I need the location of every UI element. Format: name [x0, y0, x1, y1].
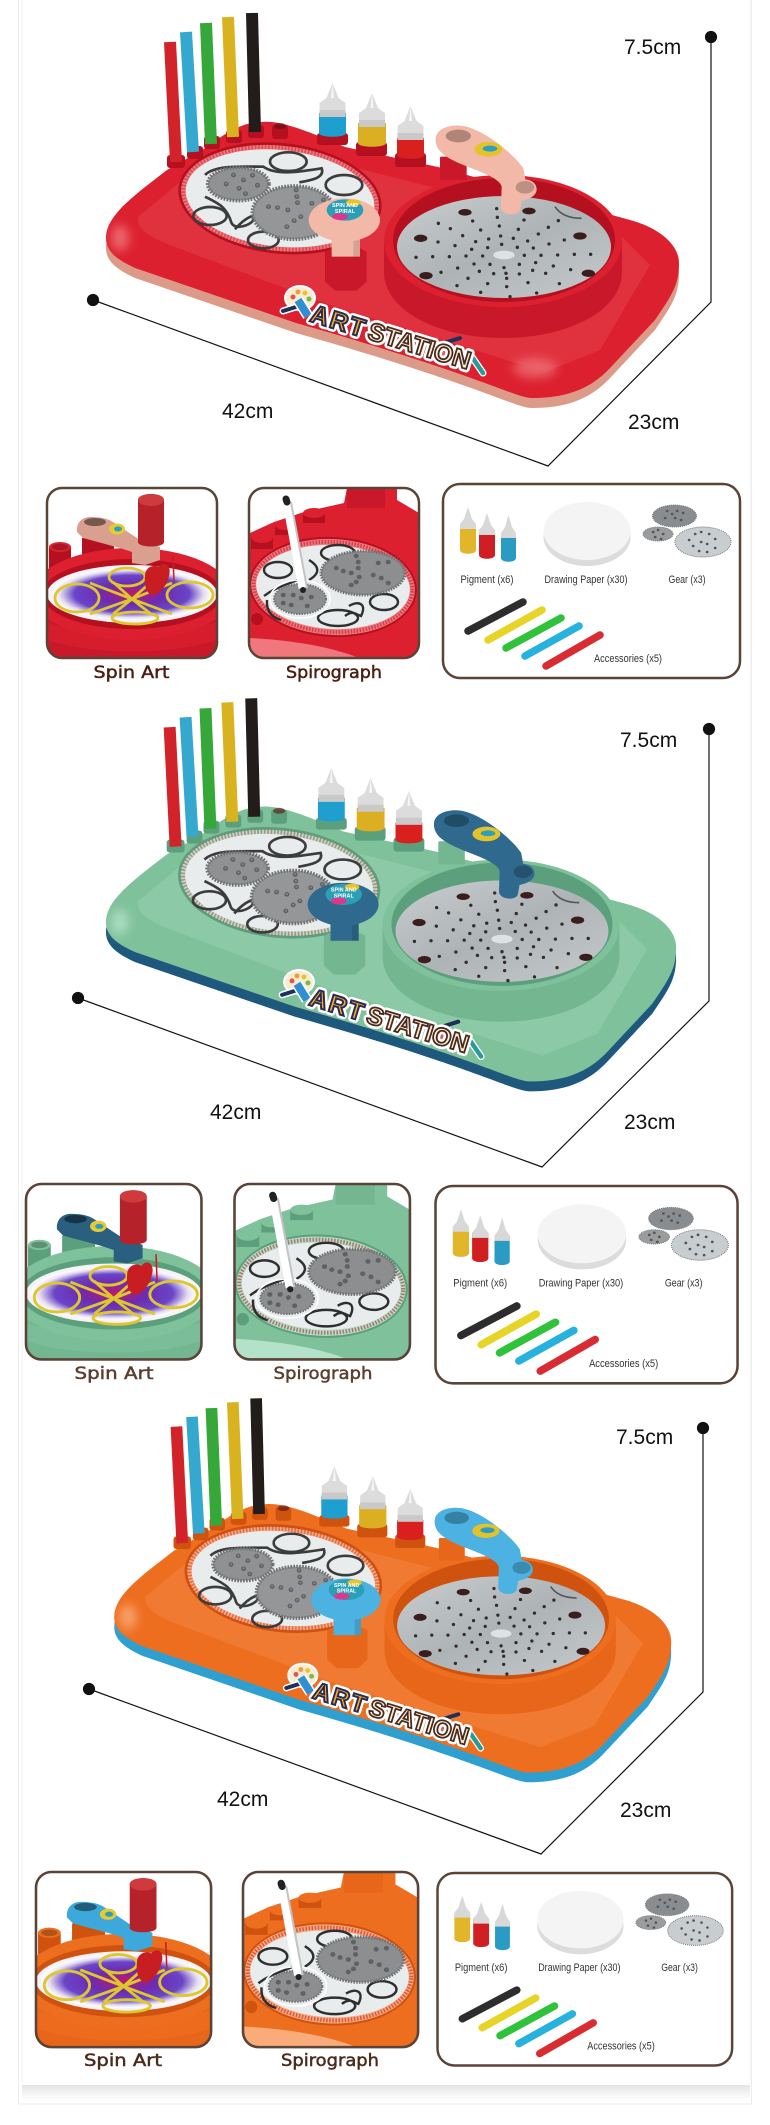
logo: STATION — [365, 318, 474, 375]
knob — [309, 198, 380, 291]
logo: ART — [306, 984, 369, 1027]
base shell — [114, 1514, 671, 1782]
deck — [114, 1504, 671, 1773]
spirograph wheel — [179, 1515, 388, 1642]
dimension label: width: 23cm — [628, 411, 679, 434]
knob sticker text: SPIRAL — [335, 209, 356, 215]
caption: spirograph: Spirograph — [274, 1364, 372, 1384]
pens — [170, 698, 254, 847]
panel: contents green — [436, 1186, 738, 1383]
panel: spin art orange — [21, 1872, 227, 2053]
product: orange art station — [114, 1398, 671, 1782]
arm — [434, 810, 534, 899]
deck — [106, 807, 676, 1081]
product: green art station — [106, 698, 676, 1091]
knob sticker text: SPIN AND — [334, 1583, 359, 1589]
corner highlight — [119, 1604, 137, 1630]
dimension label: height: 7.5cm — [624, 36, 681, 59]
dimension label: height: 7.5cm — [616, 1426, 673, 1449]
logo: ART — [310, 1678, 371, 1720]
corner highlight — [111, 225, 129, 251]
knob sticker text: SPIN AND — [332, 203, 358, 209]
panel: contents orange — [438, 1873, 732, 2065]
spin bowl — [384, 1556, 616, 1714]
panel: spirograph red — [246, 488, 420, 658]
spin bowl — [383, 860, 619, 1022]
dimension label: length: 42cm — [217, 1788, 268, 1811]
logo: ART — [307, 300, 370, 344]
deck — [106, 122, 679, 398]
panel: contents red: Pigment (x6) — [460, 574, 514, 586]
dimension label: width: 23cm — [624, 1111, 675, 1134]
logo: ART — [310, 1678, 371, 1720]
caption: spirograph: Spirograph — [286, 663, 382, 683]
spirograph wheel — [173, 133, 387, 264]
knob sticker text: SPIRAL — [337, 1589, 357, 1595]
panel: spin art green — [11, 1184, 217, 1366]
spirograph wheel — [172, 817, 386, 948]
knob — [311, 1578, 381, 1668]
panel: contents green: Gear (x3) — [665, 1278, 703, 1290]
panel: contents red: Accessories (x5) — [594, 653, 662, 665]
base shell — [106, 132, 679, 408]
logo: STATION — [366, 1695, 472, 1751]
bottles — [317, 83, 426, 167]
logo: STATION — [363, 1001, 472, 1059]
logo: STATION — [366, 1695, 472, 1751]
panel: contents green: Drawing Paper (x30) — [539, 1278, 623, 1290]
dimension lines: green — [72, 724, 714, 1167]
panel: spirograph green — [232, 1184, 410, 1359]
knob — [308, 883, 379, 975]
right highlight — [513, 358, 557, 378]
pen sockets — [167, 123, 288, 168]
arm — [436, 126, 537, 214]
knob sticker text: SPIN AND — [331, 887, 357, 893]
deck plateau — [138, 150, 650, 372]
pens — [170, 13, 255, 162]
caption: spirograph: Spirograph — [281, 2051, 379, 2071]
dimension label: length: 42cm — [210, 1101, 261, 1124]
product: red art station — [106, 13, 679, 408]
base shell — [106, 816, 676, 1091]
arm — [435, 1508, 533, 1594]
corner highlight — [111, 909, 129, 935]
panel: contents orange: Pigment (x6) — [455, 1962, 507, 1974]
caption: spin art: Spin Art — [94, 663, 170, 683]
panel: contents orange: Drawing Paper (x30) — [538, 1962, 621, 1974]
dimension label: height: 7.5cm — [620, 729, 677, 752]
logo — [286, 1663, 481, 1751]
bottles — [319, 1466, 425, 1548]
deck plateau — [138, 835, 647, 1056]
deck plateau — [145, 1532, 643, 1747]
dimension lines: orange — [84, 1422, 708, 1854]
dimension label: length: 42cm — [222, 400, 273, 423]
logo — [282, 969, 481, 1059]
panel: contents red: Gear (x3) — [668, 574, 706, 586]
panel: spin art red — [32, 488, 232, 664]
logo: ART — [307, 300, 370, 344]
caption: spin art: Spin Art — [84, 2051, 162, 2071]
panel: contents red — [443, 484, 740, 678]
panel: contents green: Accessories (x5) — [589, 1358, 658, 1370]
caption: spin art: Spin Art — [74, 1364, 154, 1384]
pens — [176, 1398, 259, 1543]
logo: STATION — [363, 1001, 472, 1059]
panel: contents red: Drawing Paper (x30) — [544, 574, 628, 586]
pen sockets — [167, 808, 287, 853]
panel: contents green: Pigment (x6) — [453, 1278, 507, 1290]
panel: contents orange: Accessories (x5) — [587, 2041, 655, 2053]
dimension lines: red — [88, 32, 716, 466]
panel: contents orange: Gear (x3) — [661, 1962, 698, 1974]
knob sticker text: SPIRAL — [334, 893, 354, 899]
pen sockets — [174, 1505, 291, 1549]
logo: ART — [306, 984, 369, 1027]
bottles — [316, 768, 424, 852]
spin bowl — [384, 175, 622, 338]
panel: spirograph orange — [240, 1872, 419, 2047]
logo — [283, 285, 483, 375]
dimension label: width: 23cm — [620, 1799, 671, 1822]
logo: STATION — [365, 318, 474, 375]
